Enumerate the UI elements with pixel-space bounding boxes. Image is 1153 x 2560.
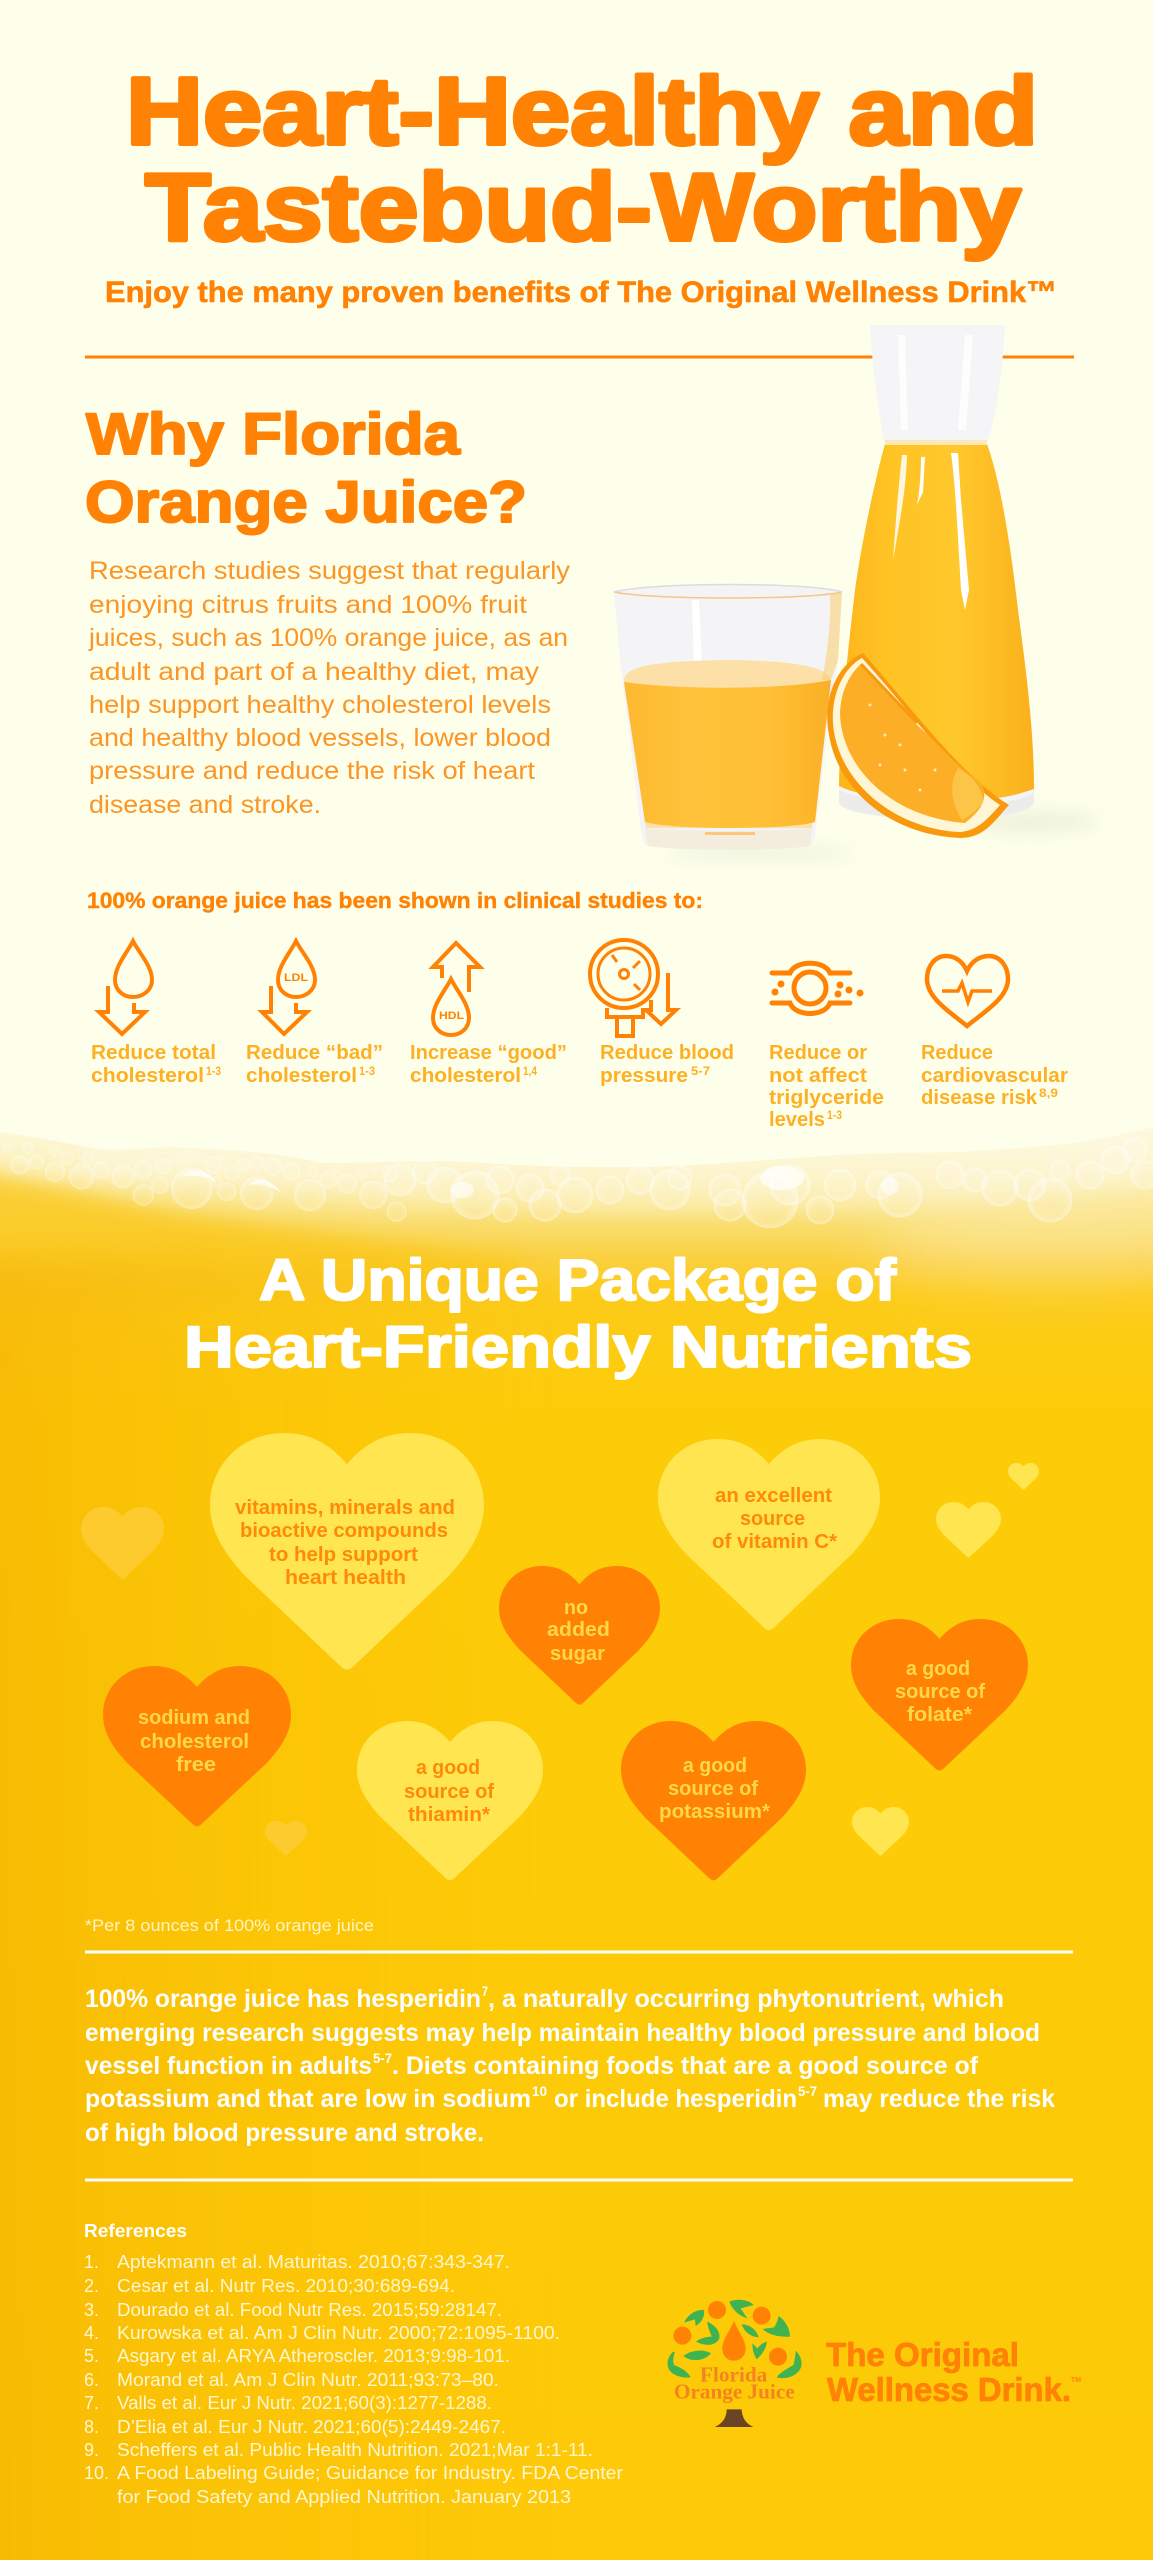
heart: a good source of thiamin: source of — [404, 1781, 494, 1803]
heart: sodium and cholesterol free: sodium and — [138, 1707, 250, 1729]
label: reduce bad cholesterol: cholesterol — [246, 1065, 357, 1087]
label: reduce bad cholesterol: 1-3 — [359, 1064, 375, 1078]
references list — [84, 2252, 623, 2507]
hesperidin paragraph: . Diets containing foods that are a good source of — [392, 2052, 979, 2080]
heart: an excellent source of vitamin C — [658, 1439, 880, 1630]
heading: why florida orange juice: Orange Juice? — [85, 470, 527, 535]
logo text: the original wellness drink: Wellness Drink. — [827, 2371, 1071, 2408]
label: reduce triglycerides: levels — [769, 1109, 825, 1131]
references heading: References — [84, 2221, 187, 2241]
heart: a good source of thiamin — [357, 1721, 543, 1880]
label: reduce triglycerides: 1-3 — [827, 1108, 842, 1122]
heart: vitamins, minerals and bioactive compounds: vitamins, minerals and — [235, 1497, 455, 1519]
references list: Cesar et al. Nutr Res. 2010;30:689-694. — [117, 2276, 455, 2296]
heart: a good source of potassium — [621, 1721, 806, 1880]
logo text: the original wellness drink: The Original — [826, 2336, 1019, 2373]
divider — [85, 1950, 1073, 1954]
heart: sodium and cholesterol free — [103, 1666, 291, 1826]
icon: HDL drop and up arrow — [433, 943, 480, 1035]
label: increase good cholesterol: 1,4 — [523, 1064, 537, 1078]
label: increase good cholesterol — [410, 1042, 567, 1087]
heart: sodium and cholesterol free: free — [176, 1754, 216, 1776]
clinical studies heading: 100% orange juice has been shown in clinical studies to: — [87, 888, 703, 913]
icon: blood pressure gauge with down arrow — [590, 940, 676, 1036]
juice background panel — [0, 1120, 1153, 2560]
references list: 2. — [84, 2276, 99, 2296]
intro paragraph: adult and part of a healthy diet, may — [89, 658, 540, 686]
heart: an excellent source of vitamin C: source — [740, 1508, 805, 1530]
hesperidin paragraph: , a naturally occurring phytonutrient, which — [488, 1985, 1004, 2013]
divider — [85, 2178, 1073, 2182]
label: reduce blood pressure: pressure — [600, 1065, 688, 1087]
label: reduce total cholesterol: Reduce total — [91, 1042, 216, 1064]
references list: Scheffers et al. Public Health Nutrition. 2021;Mar 1:1-11. — [117, 2440, 593, 2460]
label: reduce triglycerides: triglyceride — [769, 1087, 884, 1109]
label: increase good cholesterol: Increase “good” — [410, 1042, 567, 1064]
references list: Morand et al. Am J Clin Nutr. 2011;93:73–80. — [117, 2370, 499, 2390]
heading: why florida orange juice: Why Florida — [86, 402, 461, 467]
heart: an excellent source of vitamin C: of vitamin C* — [712, 1531, 837, 1553]
heart: no added sugar: sugar — [550, 1643, 605, 1665]
heading: a unique package of heart-friendly nutrients — [184, 1248, 972, 1380]
heart: a good source of potassium: source of — [668, 1778, 758, 1800]
heart: an excellent source of vitamin C: an excellent — [715, 1485, 832, 1507]
heart: a good source of potassium: a good — [683, 1755, 747, 1777]
heart: a good source of folate: a good — [906, 1658, 970, 1680]
logo: florida orange juice tree: Orange Juice — [674, 2381, 795, 2403]
references list: 10. — [84, 2463, 109, 2483]
hesperidin paragraph: or include hesperidin — [554, 2085, 797, 2113]
references list: A Food Labeling Guide; Guidance for Industry. FDA Center — [117, 2463, 623, 2483]
label: reduce total cholesterol — [91, 1042, 221, 1087]
hesperidin paragraph: emerging research suggests may help maintain healthy blood pressure and blood — [85, 2019, 1040, 2047]
intro paragraph: enjoying citrus fruits and 100% fruit — [89, 591, 527, 619]
label: reduce total cholesterol: cholesterol — [91, 1065, 204, 1087]
subtitle: Enjoy the many proven benefits of The Original Wellness Drink™ — [105, 276, 1057, 309]
label: reduce cardiovascular disease risk: Reduce — [921, 1042, 993, 1064]
label: reduce triglycerides: Reduce or — [769, 1042, 867, 1064]
foam bubbles — [2, 1138, 1153, 1228]
icon: LDL drop and down arrow — [262, 941, 315, 1034]
divider — [85, 356, 1074, 358]
references list: for Food Safety and Applied Nutrition. January 2013 — [117, 2487, 571, 2507]
references list: 6. — [84, 2370, 99, 2390]
heart: no added sugar: no — [564, 1597, 588, 1619]
heart: vitamins, minerals and bioactive compounds: to help support — [269, 1544, 418, 1566]
label: reduce blood pressure: Reduce blood — [600, 1042, 734, 1064]
label: reduce cardiovascular disease risk: cardiovascular — [921, 1065, 1068, 1087]
footnote: *Per 8 ounces of 100% orange juice — [85, 1916, 374, 1935]
decorative small hearts — [81, 1463, 1039, 1856]
title — [126, 58, 1038, 261]
label: reduce cardiovascular disease risk — [921, 1042, 1068, 1109]
references list: 9. — [84, 2440, 99, 2460]
hesperidin paragraph: 7 — [482, 1983, 488, 1999]
hesperidin paragraph: potassium and that are low in sodium — [85, 2085, 531, 2113]
hesperidin paragraph: 100% orange juice has hesperidin — [85, 1985, 481, 2013]
intro paragraph: juices, such as 100% orange juice, as an — [88, 624, 568, 652]
heart: vitamins, minerals and bioactive compounds: heart health — [285, 1567, 406, 1589]
icon: total cholesterol drop and down arrow — [99, 941, 152, 1034]
heading: why florida orange juice — [85, 402, 527, 535]
references list: Kurowska et al. Am J Clin Nutr. 2000;72:1095-1100. — [117, 2323, 560, 2343]
icon: heart with ECG line — [927, 956, 1008, 1026]
references list: Dourado et al. Food Nutr Res. 2015;59:28147. — [117, 2300, 502, 2320]
references list: Valls et al. Eur J Nutr. 2021;60(3):1277-1288. — [117, 2393, 492, 2413]
references list: Aptekmann et al. Maturitas. 2010;67:343-347. — [117, 2252, 510, 2272]
heart: vitamins, minerals and bioactive compounds — [210, 1433, 484, 1670]
heart: a good source of thiamin: a good — [416, 1757, 480, 1779]
label: reduce triglycerides — [769, 1042, 884, 1131]
heading: a unique package of heart-friendly nutrients: A Unique Package of — [259, 1248, 897, 1313]
heart: vitamins, minerals and bioactive compounds: bioactive compounds — [240, 1520, 448, 1542]
references list: 8. — [84, 2417, 99, 2437]
icon: blood vessel with triglycerides — [772, 963, 864, 1014]
intro paragraph: help support healthy cholesterol levels — [89, 691, 551, 719]
heart: a good source of thiamin: thiamin* — [408, 1804, 490, 1826]
heart: a good source of folate: folate* — [907, 1704, 972, 1726]
references list: 5. — [84, 2346, 99, 2366]
references list: 7. — [84, 2393, 99, 2413]
references list: 4. — [84, 2323, 99, 2343]
label: reduce cardiovascular disease risk: disease risk — [921, 1087, 1038, 1109]
label: reduce triglycerides: not affect — [769, 1065, 867, 1087]
references list: Asgary et al. ARYA Atheroscler. 2013;9:98-101. — [117, 2346, 510, 2366]
references list: 3. — [84, 2300, 99, 2320]
hesperidin paragraph: 5-7 — [373, 2050, 392, 2066]
hesperidin paragraph: 5-7 — [798, 2083, 817, 2099]
label: reduce total cholesterol: 1-3 — [206, 1064, 221, 1078]
heart: no added sugar — [499, 1566, 660, 1705]
icon: HDL drop and up arrow: HDL — [439, 1010, 464, 1022]
title: Tastebud-Worthy — [145, 154, 1021, 261]
label: reduce bad cholesterol — [246, 1042, 383, 1087]
title: Heart-Healthy and — [126, 58, 1038, 165]
hesperidin paragraph: 10 — [532, 2083, 547, 2099]
intro paragraph: disease and stroke. — [89, 791, 321, 819]
label: reduce blood pressure: 5-7 — [691, 1064, 710, 1078]
heart: no added sugar: added — [547, 1619, 610, 1641]
heart: a good source of folate — [851, 1619, 1028, 1770]
logo text: the original wellness drink — [826, 2336, 1081, 2408]
heart: sodium and cholesterol free: cholesterol — [140, 1731, 249, 1753]
logo: florida orange juice tree: Florida — [700, 2365, 768, 2387]
label: reduce bad cholesterol: Reduce “bad” — [246, 1042, 383, 1064]
hesperidin paragraph: may reduce the risk — [823, 2085, 1055, 2113]
glass — [614, 584, 842, 850]
icon: LDL drop and down arrow: LDL — [284, 972, 308, 984]
references list: D’Elia et al. Eur J Nutr. 2021;60(5):2449-2467. — [117, 2417, 506, 2437]
hesperidin paragraph: of high blood pressure and stroke. — [85, 2119, 484, 2147]
label: increase good cholesterol: cholesterol — [410, 1065, 521, 1087]
label: reduce blood pressure — [600, 1042, 734, 1087]
intro paragraph: pressure and reduce the risk of heart — [89, 757, 535, 785]
hesperidin paragraph — [85, 1983, 1055, 2147]
references list: 1. — [84, 2252, 99, 2272]
heart: a good source of potassium: potassium* — [659, 1801, 770, 1823]
photo: carafe, glass and orange wedge — [614, 325, 1100, 859]
orange wedge — [827, 653, 1009, 838]
intro paragraph — [88, 557, 571, 819]
logo text: the original wellness drink: TM — [1071, 2377, 1081, 2384]
carafe — [839, 325, 1034, 819]
intro paragraph: Research studies suggest that regularly — [89, 557, 571, 585]
heading: a unique package of heart-friendly nutrients: Heart-Friendly Nutrients — [184, 1315, 972, 1380]
label: reduce cardiovascular disease risk: 8,9 — [1039, 1086, 1058, 1100]
hesperidin paragraph: vessel function in adults — [85, 2052, 372, 2080]
intro paragraph: and healthy blood vessels, lower blood — [89, 724, 551, 752]
heart: a good source of folate: source of — [895, 1681, 985, 1703]
logo: florida orange juice tree — [668, 2300, 802, 2427]
